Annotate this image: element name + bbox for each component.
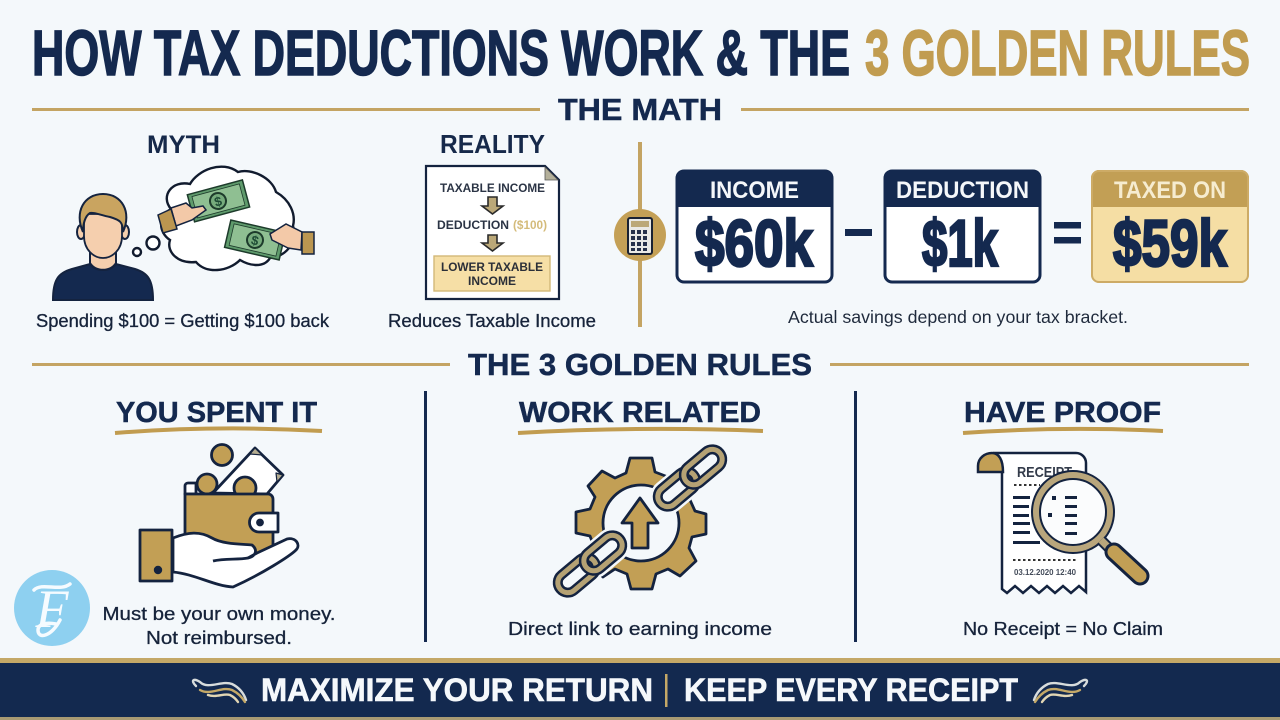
icon: right flourish bbox=[1034, 680, 1087, 702]
footer banner bbox=[0, 658, 1280, 720]
title: HOW TAX DEDUCTIONS WORK & THE bbox=[32, 17, 850, 89]
heading: the math: THE MATH bbox=[558, 92, 722, 127]
reality heading: REALITY bbox=[440, 129, 545, 159]
equation card: taxed on bbox=[1091, 170, 1249, 283]
rule caption: Not reimbursed. bbox=[146, 628, 292, 648]
footer banner: KEEP EVERY RECEIPT bbox=[684, 672, 1018, 708]
icon: receipt and magnifier: RECEIPT bbox=[1017, 464, 1072, 481]
heading: the 3 golden rules: THE 3 GOLDEN RULES bbox=[468, 347, 812, 382]
rule heading: HAVE PROOF bbox=[964, 397, 1161, 429]
logo badge bbox=[14, 570, 90, 646]
document: ($100) bbox=[513, 218, 547, 232]
column divider bbox=[854, 391, 857, 642]
icon: cash in hand, giving: $ bbox=[213, 193, 224, 210]
document: TAXABLE INCOME bbox=[440, 181, 545, 195]
rule caption: No Receipt = No Claim bbox=[963, 619, 1163, 639]
equation card: income: INCOME bbox=[710, 177, 799, 204]
equation card: deduction: $1k bbox=[922, 206, 998, 280]
equation note: Actual savings depend on your tax bracket. bbox=[788, 307, 1128, 327]
reality caption: Reduces Taxable Income bbox=[388, 311, 596, 331]
equation card: income: $60k bbox=[695, 206, 813, 280]
rule heading: YOU SPENT IT bbox=[116, 397, 317, 429]
rule caption: Direct link to earning income bbox=[508, 619, 772, 639]
icon: person bbox=[53, 194, 153, 300]
panel: work related bbox=[508, 397, 772, 639]
equation card: taxed on: TAXED ON bbox=[1114, 177, 1226, 204]
document: INCOME bbox=[468, 274, 516, 288]
icon: gear and chain bbox=[554, 445, 726, 597]
panel: you spent it bbox=[102, 397, 336, 648]
column divider bbox=[424, 391, 427, 642]
rule caption: Must be your own money. bbox=[102, 604, 336, 624]
document bbox=[426, 166, 559, 299]
icon: cash in hand, receiving bbox=[225, 220, 314, 260]
document: DEDUCTION bbox=[437, 218, 509, 232]
footer text: MAXIMIZE YOUR RETURN bbox=[261, 672, 653, 708]
document: LOWER TAXABLE bbox=[441, 260, 543, 274]
heading: the 3 golden rules bbox=[32, 347, 1249, 382]
icon: cash in hand, receiving: $ bbox=[250, 232, 261, 249]
equation card: income bbox=[676, 170, 833, 282]
equation card: taxed on: $59k bbox=[1113, 206, 1227, 280]
minus sign bbox=[845, 229, 872, 236]
heading: the math bbox=[32, 92, 1249, 127]
equals sign bbox=[1054, 222, 1081, 244]
rule heading: WORK RELATED bbox=[519, 397, 761, 429]
icon: receipt and magnifier bbox=[978, 453, 1140, 593]
panel: myth bbox=[36, 131, 330, 331]
icon: thought cloud bbox=[133, 167, 294, 270]
logo badge: F bbox=[34, 579, 70, 639]
divider with calculator icon bbox=[614, 142, 666, 327]
myth caption: Spending $100 = Getting $100 back bbox=[36, 311, 330, 331]
icon: left flourish bbox=[193, 680, 246, 702]
icon: receipt and magnifier: 03.12.2020 12:40 bbox=[1014, 567, 1076, 577]
panel: reality bbox=[388, 129, 596, 331]
myth heading: MYTH bbox=[147, 131, 220, 159]
equation card: deduction bbox=[884, 170, 1041, 282]
equation card: deduction: DEDUCTION bbox=[896, 177, 1029, 204]
panel: have proof bbox=[963, 397, 1163, 639]
rule caption bbox=[102, 604, 336, 648]
icon: cash in hand, giving bbox=[158, 180, 250, 233]
icon: wallet and hand bbox=[140, 444, 298, 587]
